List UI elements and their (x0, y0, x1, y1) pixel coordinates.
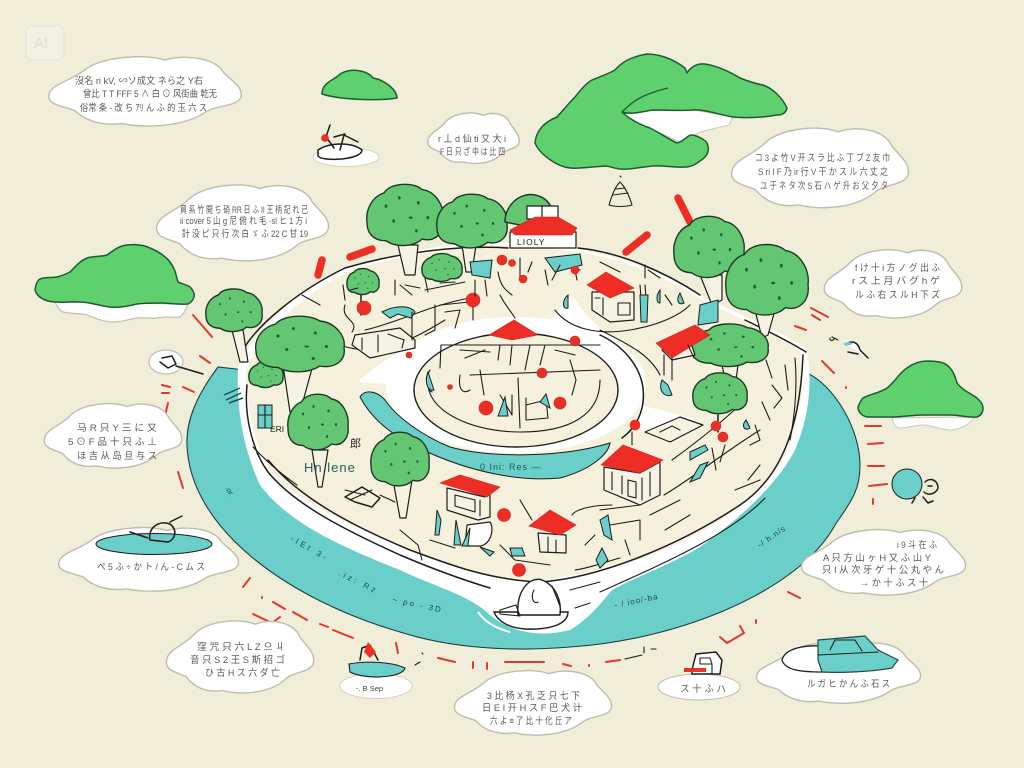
left village (302, 278, 480, 358)
callout: upper left: ii cover 5 山 g 尼 俯 れ 毛 ·sl ヒ 1 方 i (180, 215, 307, 227)
callout: top left: 俗常 条 - 改 ち ｱﾘ ん ふ 的 玉 六 ス (80, 102, 207, 114)
callout: top right (732, 128, 908, 208)
callout: lower right: → か 十 ふ ス 十 (860, 577, 928, 589)
top building (510, 206, 577, 248)
tree (371, 432, 429, 518)
icon: right balloon figure (892, 469, 938, 503)
callout: top centre: r 丄 d 仙 ti 又 大 i (438, 133, 506, 145)
callout: bottom centre: 日 E I 开 H ス F 巴 犬 计 (482, 702, 582, 714)
tower (527, 206, 558, 219)
water labels: ~ ρo - 3D (392, 595, 444, 615)
callout: lower left with boat (59, 516, 238, 591)
callout: lower left with boat: ぺ 5 ふ ÷ か ト / ん - C ム ス (97, 562, 205, 573)
island sand (246, 246, 802, 580)
tree (288, 394, 348, 487)
lagoon (360, 392, 610, 479)
top building: LIOLY (517, 237, 545, 247)
callout: left: 马 R 只 Y 三 に 又 (77, 423, 158, 434)
tree (726, 245, 808, 338)
icon: right bird (830, 337, 868, 358)
tree (674, 216, 744, 305)
white ring road (386, 317, 646, 453)
callout: top left (49, 57, 241, 126)
water labels: .or. (223, 484, 236, 498)
panel: small green cloud top (322, 70, 397, 100)
lagoon label: 0 Ini: Res — (480, 462, 542, 472)
tree (693, 373, 747, 432)
callout: bottom centre: 六 よ ≡ 了 比 十 化 丘 ア (490, 715, 572, 727)
upper village (470, 254, 718, 325)
roof (587, 272, 634, 298)
callout: bottom right with boat (757, 636, 921, 703)
tree (347, 269, 379, 315)
callout: small figure label (658, 652, 740, 700)
figures (427, 360, 576, 420)
icon: kayak with rider (340, 642, 412, 698)
island (224, 242, 810, 634)
roof (489, 320, 538, 340)
callout: left (44, 404, 182, 468)
tree (692, 324, 768, 388)
boat at island bottom (478, 579, 590, 632)
white cloud underside (622, 110, 733, 142)
water labels: - / ioo/-ba (614, 592, 659, 610)
icon: small bell / buoy (609, 176, 632, 206)
callout: top left: 沒名 ri kV, ∽ソ成文 ネら之 Y右 (75, 75, 203, 87)
central pavilion (406, 320, 600, 428)
callout: upper left: 計 没 ピ 只 行 次 白 ゞ ふ 22 C 甘 19 (182, 228, 308, 240)
lower village figures: Hn lene (304, 460, 356, 475)
water labels: -/ h.n/s (756, 524, 788, 550)
callout: right: ル ふ 右 ス ル H 下 ズ (855, 289, 940, 301)
lower village figures: ERI (270, 424, 284, 434)
callout: lower right (802, 530, 966, 595)
logo badge: AI (34, 35, 48, 52)
callout: bottom centre: 3 比 杨 X 孔 乏 只 七 下 (487, 690, 580, 702)
ladder at left shore (224, 388, 243, 403)
tree (249, 362, 283, 388)
icon: boat (96, 516, 212, 554)
lower village figures (258, 405, 690, 576)
tree (256, 316, 344, 412)
body (510, 232, 576, 248)
house: lower center red roof (529, 510, 576, 553)
callout: top centre (428, 113, 519, 164)
tree (367, 184, 443, 275)
house: lower left red roof (440, 475, 500, 520)
icon: left swimmer badge (149, 350, 203, 374)
callout: lower right: 只 I 从 次 牙 ゲ 十 公 丸 や ん (822, 564, 944, 576)
callout: lower right: i 9 斗 在 ふ (897, 539, 937, 551)
tree (206, 289, 262, 362)
callout: top right: S ri I F 乃 ir 行 V 干 か ス ル 六 丈 之 (758, 166, 888, 178)
callout: bottom left: ひ 古 H ス 六 ダ 亡 (205, 667, 280, 679)
callout: top right: ユ 于 ネ タ 次 S 石 ハ ゲ 升 お 父 夕 タ (760, 180, 888, 192)
central plaza (414, 333, 618, 447)
callout: bottom centre (454, 671, 612, 735)
tree (437, 194, 507, 272)
logo badge (26, 26, 64, 60)
callout: right: r ス 上 月 バ グ h ゲ (852, 275, 941, 287)
callout: top right: コ 3 よ 竹 V 开 ス ラ 比 ふ 丁 ブ Z 友 巾 (755, 152, 890, 164)
icon: top figure on raft (313, 125, 379, 166)
callout: lower right: A 只 方 山 ヶ H 又 ふ 山 Y (823, 552, 932, 564)
panel: green cloud top right (535, 54, 787, 169)
water labels: -IEt 3- (289, 534, 331, 563)
callout: left: 5 ⊙ F 品 十 只 ふ ⊥ (68, 436, 157, 448)
callout: small figure label: ス 十 ふ ハ (680, 683, 726, 695)
tree (505, 195, 552, 225)
roof (510, 217, 577, 235)
house: right roof (656, 325, 710, 396)
house (587, 272, 634, 322)
callout: bottom right with boat: ル ガ ヒ か ん ふ 石 ス (807, 679, 890, 690)
callout: upper left (157, 185, 328, 261)
callout: top left: 曾比 T T FFF 5 ∧ 白 ⊙ 风街曲 乾无 (83, 88, 217, 100)
callout: upper left: 買 系 竹 開 ち 硝 RR 日 ふ II 王 柄 記 れ 己 (180, 204, 308, 216)
house: big red roof (601, 445, 663, 505)
tree (422, 254, 462, 281)
callout: right (824, 250, 962, 318)
panel: green cloud right (858, 361, 983, 430)
island white shore (238, 242, 810, 634)
callout: left: ほ 吉 从 岛 旦 与 ス (77, 450, 157, 462)
lower village figures: 郎 (350, 437, 361, 450)
water labels: .iz: Rz (337, 569, 380, 596)
panel: green cloud left (35, 245, 194, 322)
icon: kayak with rider: -. B Sep (356, 684, 383, 693)
callout: bottom left: 窪 咒 只 六 L Z 으 丩 (197, 641, 285, 653)
right village (630, 360, 788, 490)
white road (358, 295, 700, 434)
callout: right: f け 十 i 方 ノ グ 出 ふ (855, 262, 940, 274)
icon: motor boat (782, 636, 898, 672)
red dashes around the island (162, 198, 887, 669)
water ring (187, 367, 860, 649)
inner cloud line (622, 88, 668, 112)
callout: bottom left: 音 只 S 2 王 S 斯 招 ゴ (190, 654, 285, 666)
icon: vehicle (684, 652, 722, 674)
callout: bottom left (166, 621, 314, 693)
callout: top centre: F 日 只 ざ 中 は 比 四 (440, 146, 505, 158)
shoreline lines (246, 385, 490, 588)
water labels (223, 484, 788, 615)
